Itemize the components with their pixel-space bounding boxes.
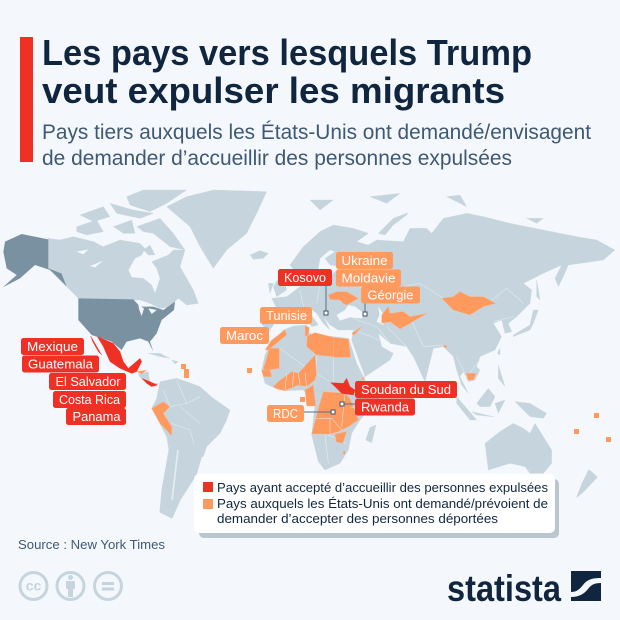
small island countries bbox=[181, 364, 611, 442]
label: Tunisie: Tunisie bbox=[266, 308, 307, 323]
Central and Southern Africa bbox=[312, 392, 358, 434]
Peru bbox=[152, 402, 172, 436]
legend item: requested: Pays auxquels les États-Unis ont demandé/prévoient de bbox=[217, 496, 548, 511]
map: Canada and Arctic bbox=[48, 190, 198, 308]
Alaska bbox=[3, 234, 67, 287]
label: Moldavie: Moldavie bbox=[342, 270, 396, 286]
icon: Statista mark bbox=[571, 571, 601, 601]
red accent bar bbox=[20, 37, 33, 162]
Libya bbox=[307, 333, 333, 357]
United States bbox=[78, 298, 175, 352]
map: Eurasia bbox=[262, 193, 615, 420]
label: Géorgie bbox=[361, 286, 420, 304]
Bhutan bbox=[443, 345, 447, 348]
South Sudan bbox=[331, 378, 355, 395]
label: Kosovo: Kosovo bbox=[284, 270, 326, 285]
Georgia bbox=[363, 313, 369, 317]
Central Asia bbox=[382, 307, 427, 329]
Arctic islands bbox=[77, 190, 187, 255]
Mexico and Guatemala bbox=[91, 336, 142, 373]
Black Sea bbox=[337, 305, 365, 321]
Madagascar bbox=[366, 425, 376, 443]
logo: Statista: statista bbox=[447, 568, 561, 609]
title: veut expulser les migrants bbox=[42, 70, 505, 111]
label: Costa Rica: Costa Rica bbox=[59, 392, 121, 407]
label: Maroc bbox=[220, 327, 269, 344]
Canada mainland bbox=[48, 237, 198, 308]
label: Panama: Panama bbox=[72, 409, 121, 424]
label: Rwanda: Rwanda bbox=[361, 400, 410, 414]
Syria bbox=[352, 327, 362, 335]
legend bbox=[194, 474, 559, 538]
map: Alaska, Greenland, South America bbox=[3, 190, 268, 457]
connector: RDC bbox=[304, 410, 335, 414]
title: Les pays vers lesquels Trump bbox=[42, 32, 532, 73]
label: Maroc: Maroc bbox=[226, 328, 264, 343]
Greenland bbox=[167, 190, 267, 268]
Eswatini bbox=[343, 451, 345, 454]
subtitle: de demander d’accueillir des personnes expulsées bbox=[42, 147, 512, 170]
Mauritania and Western Sahara bbox=[263, 348, 279, 371]
Honduras bbox=[137, 370, 147, 374]
icon: creative commons licence: cc bbox=[26, 578, 41, 594]
Caspian Sea bbox=[377, 307, 385, 325]
map: southern South America, New Zealand bbox=[160, 445, 597, 518]
Egypt bbox=[333, 337, 351, 357]
map: USA, Mexico, Central America bbox=[78, 298, 175, 387]
Morocco bbox=[265, 330, 287, 350]
connector: Kosovo bbox=[324, 286, 328, 315]
connector: Rwanda bbox=[340, 402, 356, 406]
legend item: requested: demander d’accepter des personnes déportées bbox=[217, 512, 498, 526]
African borders bbox=[280, 348, 353, 463]
label: Ukraine: Ukraine bbox=[342, 253, 388, 268]
Canadian lakes bbox=[77, 249, 103, 267]
West Africa bbox=[273, 355, 317, 391]
label: Mexique: Mexique bbox=[27, 339, 78, 354]
label: El Salvador: El Salvador bbox=[56, 374, 121, 389]
Zimbabwe bbox=[335, 432, 347, 443]
Cambodia bbox=[466, 373, 476, 380]
legend item: accepted: Pays ayant accepté d’accueillir des personnes expulsées bbox=[217, 481, 548, 495]
world map bbox=[3, 190, 615, 518]
label: Géorgie: Géorgie bbox=[368, 288, 414, 302]
Iceland bbox=[250, 251, 268, 259]
label: Guatemala: Guatemala bbox=[28, 356, 94, 372]
legend item: requested bbox=[203, 496, 548, 526]
Asian and European borders bbox=[300, 277, 523, 377]
Asian islands bbox=[310, 193, 547, 420]
Senegal and Gambia bbox=[262, 370, 272, 377]
connector: Géorgie bbox=[363, 303, 367, 316]
Cameroon and Gabon bbox=[305, 385, 316, 406]
Costa Rica and Panama bbox=[142, 378, 157, 387]
source: Source : New York Times bbox=[18, 537, 165, 552]
Ukraine bbox=[328, 292, 358, 305]
Mongolia bbox=[442, 292, 496, 315]
icon: creative commons licence bbox=[20, 572, 122, 600]
label: Ukraine bbox=[336, 252, 393, 269]
label: RDC: RDC bbox=[273, 406, 298, 421]
Tunisia bbox=[305, 326, 309, 337]
label: Mexique bbox=[21, 338, 84, 355]
subtitle: Pays tiers auxquels les États-Unis ont demandé/envisagent bbox=[42, 121, 591, 144]
Djibouti bbox=[362, 377, 364, 380]
label: RDC bbox=[267, 405, 304, 422]
Central America land bbox=[138, 372, 158, 387]
label: Soudan du Sud: Soudan du Sud bbox=[361, 382, 451, 397]
Caribbean islands bbox=[148, 353, 178, 364]
British Isles bbox=[268, 273, 287, 297]
South America borders bbox=[163, 380, 200, 453]
map: Australia bbox=[485, 423, 552, 473]
Great Lakes bbox=[138, 305, 157, 316]
South America bbox=[152, 378, 230, 457]
map: Africa bbox=[262, 325, 383, 470]
